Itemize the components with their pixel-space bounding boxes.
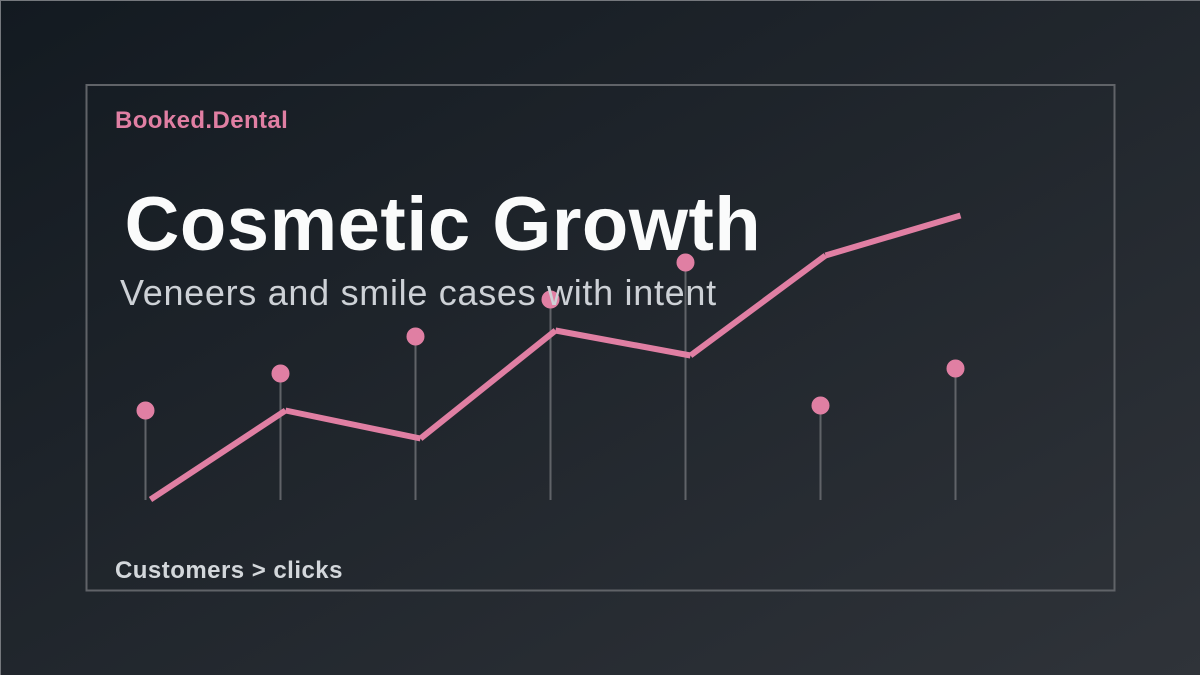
brand label: Booked.Dental	[115, 107, 288, 134]
footer tagline: Customers > clicks	[115, 557, 343, 584]
lollipop stems	[146, 262, 956, 500]
lollipop dots	[136, 254, 964, 420]
subtitle: Veneers and smile cases with intent	[120, 272, 717, 313]
panel frame	[86, 85, 1114, 590]
title: Cosmetic Growth	[124, 182, 761, 267]
trend line	[150, 216, 960, 500]
